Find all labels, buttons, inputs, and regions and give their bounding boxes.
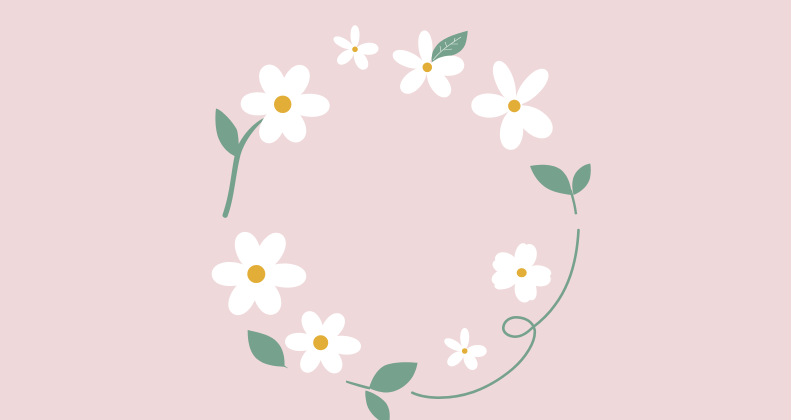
flower: large lower left xyxy=(212,228,307,320)
flower: top centre xyxy=(390,30,465,101)
flower: large upper left xyxy=(241,60,330,147)
curling vine with loop xyxy=(412,230,578,398)
flower: ruffled right xyxy=(489,241,553,304)
two-leaf sprig, right xyxy=(530,164,591,214)
stem with leaf, upper left xyxy=(215,108,268,218)
leaf with white veins, top xyxy=(432,31,468,62)
flower: upper right xyxy=(471,58,558,151)
flower: bottom left xyxy=(285,308,362,377)
flower: tiny bottom right xyxy=(442,328,487,372)
two-leaf sprig, bottom xyxy=(346,362,418,420)
leaf: lower left xyxy=(248,330,288,368)
flower: tiny top xyxy=(332,25,379,72)
